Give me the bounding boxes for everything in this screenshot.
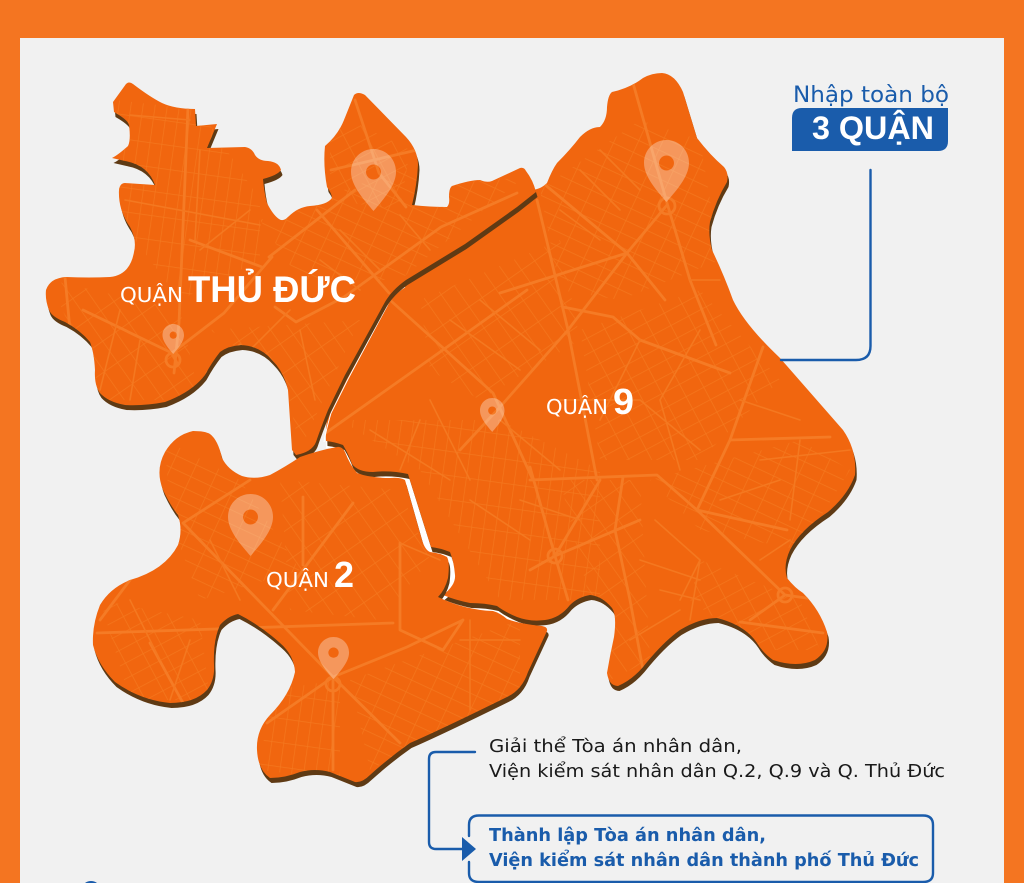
text: dissolved courts: Giải thể Tòa án nhân dân, xyxy=(489,736,742,757)
map pin: Thủ Đức north xyxy=(351,149,396,211)
icon: cropped circle at bottom edge xyxy=(82,882,100,883)
box: new courts of Thủ Đức city: Thành lập Tòa án nhân dân, xyxy=(489,826,766,846)
connector line from callout to map xyxy=(781,170,870,360)
text: dissolved courts: Viện kiểm sát nhân dân Q.2, Q.9 và Q. Thủ Đức xyxy=(489,761,945,782)
map pin: Quận 2 south xyxy=(318,637,349,679)
box: new courts of Thủ Đức city xyxy=(469,816,933,882)
label: Quận 9 xyxy=(546,381,634,422)
district shape: Quận 2 xyxy=(93,431,549,787)
label: Quận 2: 2 xyxy=(334,554,354,595)
map pin: Quận 9 centre xyxy=(480,398,504,432)
text: dissolved courts xyxy=(489,736,945,782)
label: Quận Thủ Đức: QUẬN xyxy=(120,282,183,307)
arrow connector to new courts box xyxy=(429,752,476,861)
callout: Nhập toàn bộ 3 quận: 3 QUẬN xyxy=(812,110,934,146)
map pin: Quận 9 north xyxy=(644,140,689,202)
callout: Nhập toàn bộ 3 quận xyxy=(792,82,949,151)
label: Quận 9: QUẬN xyxy=(546,394,608,419)
label: Quận 2 xyxy=(266,554,354,595)
box: new courts of Thủ Đức city: Viện kiểm sát nhân dân thành phố Thủ Đức xyxy=(489,849,919,871)
map of the three districts xyxy=(46,73,857,787)
callout: Nhập toàn bộ 3 quận: Nhập toàn bộ xyxy=(793,82,949,108)
label: Quận Thủ Đức: THỦ ĐỨC xyxy=(188,268,356,310)
label: Quận 9: 9 xyxy=(613,381,634,422)
map pin: Quận 2 north xyxy=(228,494,273,556)
district shape: Quận 9 xyxy=(320,73,857,691)
map pin: Thủ Đức south xyxy=(162,324,184,354)
label: Quận 2: QUẬN xyxy=(266,567,329,592)
label: Quận Thủ Đức xyxy=(120,268,356,310)
district shape: Quận Thủ Đức xyxy=(46,82,538,460)
